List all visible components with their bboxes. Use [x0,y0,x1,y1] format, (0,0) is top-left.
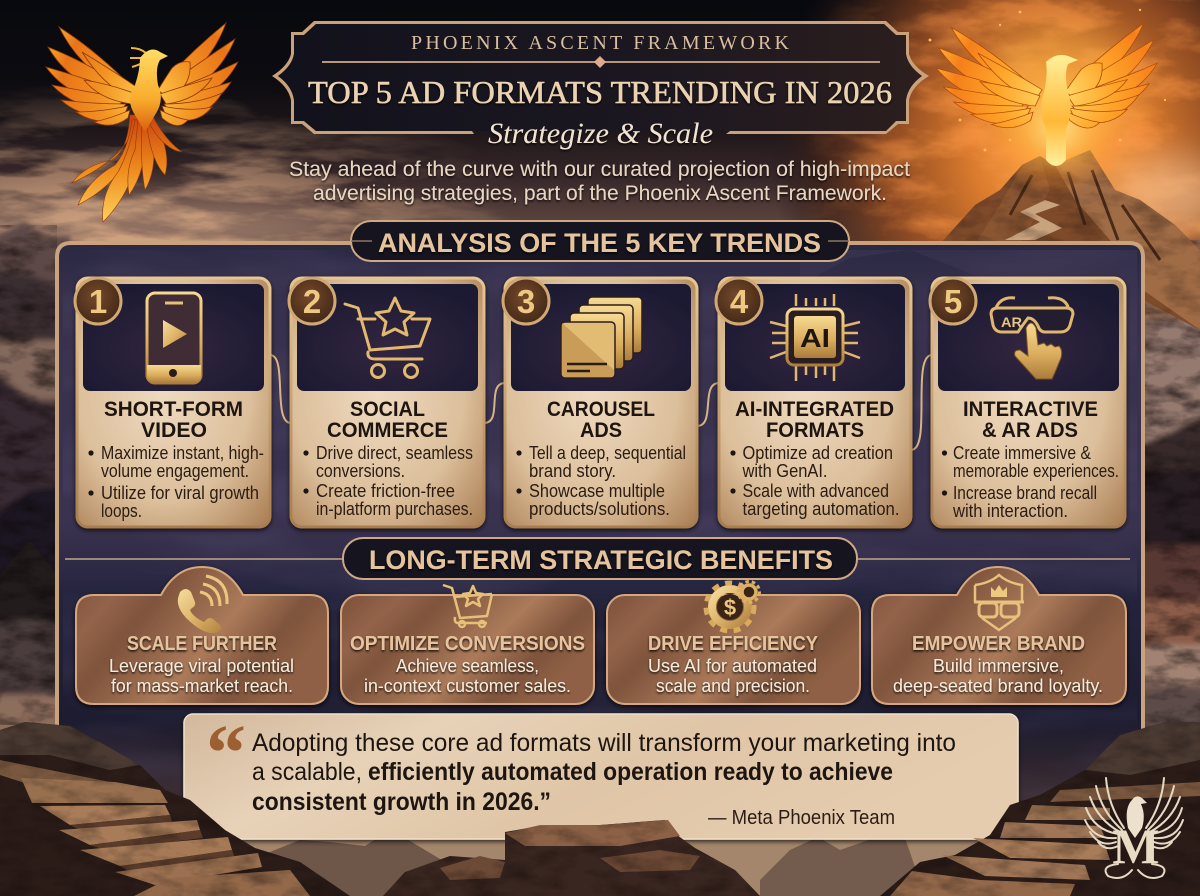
connectors between cards [270,355,932,450]
benefit text [109,655,294,696]
tail feathers [72,115,182,222]
bullets: volume engagement. [101,461,249,481]
quote text: efficiently automated operation ready to achieve [368,758,893,786]
intro text [289,158,910,205]
bullets: Create immersive & [953,443,1091,463]
card heading: INTERACTIVE [963,398,1098,421]
card heading [104,398,243,442]
bullets: Maximize instant, high- [101,443,264,463]
benefit 1: scale further [76,567,328,704]
number badge: 2 [303,283,321,320]
number badge [289,278,335,324]
tagline: Strategize & Scale [488,117,713,150]
bullets: Utilize for viral growth [101,483,259,503]
bullets [730,443,900,519]
card 3: carousel ads [503,278,697,527]
icon: cart with star [443,585,492,627]
icon: shopping cart with star [345,298,430,378]
icon: AR glasses and pointing hand: AR [1001,314,1022,330]
card heading: COMMERCE [327,419,448,442]
benefit title: SCALE FURTHER [127,633,277,655]
bullets: with interaction. [952,501,1068,521]
card heading [327,398,448,442]
main panel [57,243,1143,803]
card heading: AI-INTEGRATED [735,398,894,421]
card 4: AI-integrated formats [716,278,911,527]
number badge: 4 [730,283,749,320]
card heading: SHORT-FORM [104,398,243,421]
distant landscape [0,830,1200,896]
section heading: analysis: ANALYSIS OF THE 5 KEY TRENDS [378,228,821,258]
icon: stacked carousel cards [561,297,642,378]
benefit text: for mass-market reach. [111,675,293,696]
number badge: 3 [517,283,535,320]
card heading: ADS [580,419,622,442]
divider with diamond [322,61,880,63]
phoenix right [928,9,1166,166]
intro text: Stay ahead of the curve with our curated projection of high-impact [289,158,910,181]
side mountains left [0,222,70,735]
card heading: FORMATS [766,419,864,442]
bullets: targeting automation. [742,499,900,519]
benefit title: DRIVE EFFICIENCY [648,633,819,655]
bullets: conversions. [316,461,405,481]
icon: shield with crown and glasses [974,575,1024,630]
card 5: interactive and AR ads [930,278,1125,527]
section heading: benefits [65,538,1130,579]
number badge [716,278,762,324]
icon: phone with play button [147,293,201,383]
icon: AI chip [770,294,860,381]
benefit text: Build immersive, [933,655,1064,676]
intro text: advertising strategies, part of the Phoenix Ascent Framework. [313,182,887,205]
icon: AR glasses and pointing hand [991,298,1073,379]
card heading: CAROUSEL [547,398,655,421]
rock texture [0,720,1200,896]
bullets: Scale with advanced [742,481,889,501]
quote text: Adopting these core ad formats will transform your marketing into [252,729,956,757]
number badge: 5 [944,283,962,320]
attribution: — Meta Phoenix Team [708,807,895,829]
card 2: social commerce [289,278,484,527]
quote text: consistent growth in 2026.” [252,788,551,816]
number badge [75,278,121,324]
number badge: 1 [89,283,107,320]
card heading [547,398,655,442]
card heading: VIDEO [141,419,207,442]
quote box [184,710,1018,839]
bullets: Drive direct, seamless [316,443,473,463]
benefit text [364,655,571,696]
benefit text [893,655,1103,696]
bullets [88,443,264,521]
icon: AI chip: AI [800,323,830,353]
icon: gears with dollar [706,582,760,631]
logo: phoenix M emblem: M [1112,818,1160,874]
benefit text: Leverage viral potential [109,655,294,676]
card heading: SOCIAL [350,398,425,421]
bullets: Showcase multiple [529,481,665,501]
bullets: Create friction-free [316,481,455,501]
rock stairs left [0,722,350,896]
sparks [928,9,1166,151]
bullets: with GenAI. [742,461,828,481]
header plaque [272,21,929,150]
number badge [930,278,976,324]
bullets [516,443,686,519]
bullets: Tell a deep, sequential [529,443,686,463]
bullets: Increase brand recall [953,483,1097,503]
benefit title: EMPOWER BRAND [912,633,1085,655]
center rock [383,820,760,896]
bullets: memorable experiences. [953,461,1119,481]
quote text [252,729,956,816]
icon: quotation mark: “ [206,710,246,798]
benefit text: scale and precision. [656,675,810,696]
benefit 2: optimize conversions [341,585,594,704]
rock stairs right [880,722,1200,896]
benefit 4: empower brand [872,567,1126,704]
bullets: in-platform purchases. [316,499,473,519]
icon: gears with dollar: $ [724,595,736,620]
bullets [942,443,1119,521]
benefit title: OPTIMIZE CONVERSIONS [350,633,585,655]
quote text: a scalable, [252,758,362,786]
eyebrow: PHOENIX ASCENT FRAMEWORK [411,32,790,54]
benefit text: in-context customer sales. [364,675,571,696]
benefit 3: drive efficiency [607,582,860,704]
body and head [130,48,168,132]
section heading: benefits: LONG-TERM STRATEGIC BENEFITS [369,545,833,575]
benefit text: Use AI for automated [648,655,817,676]
logo: phoenix M emblem [1085,778,1183,878]
side mountains right [1130,240,1200,730]
bullets: brand story. [529,461,616,481]
card heading [735,398,894,442]
bullets: Optimize ad creation [742,443,893,463]
mountain peak under right phoenix [943,81,1200,330]
benefit text [648,655,817,696]
card heading [963,398,1098,442]
benefit text: deep-seated brand loyalty. [893,675,1103,696]
card 1: short-form video [75,278,270,527]
body and head [1041,55,1078,166]
phoenix left [46,23,238,222]
number badge [503,278,549,324]
bullets: loops. [101,501,142,521]
title: TOP 5 AD FORMATS TRENDING IN 2026 [308,74,892,110]
bullets [303,443,473,519]
section heading: analysis [351,221,849,261]
icon: phone with signal waves [178,576,227,633]
card heading: & AR ADS [982,419,1078,442]
benefit text: Achieve seamless, [396,655,539,676]
bullets: products/solutions. [529,499,670,519]
